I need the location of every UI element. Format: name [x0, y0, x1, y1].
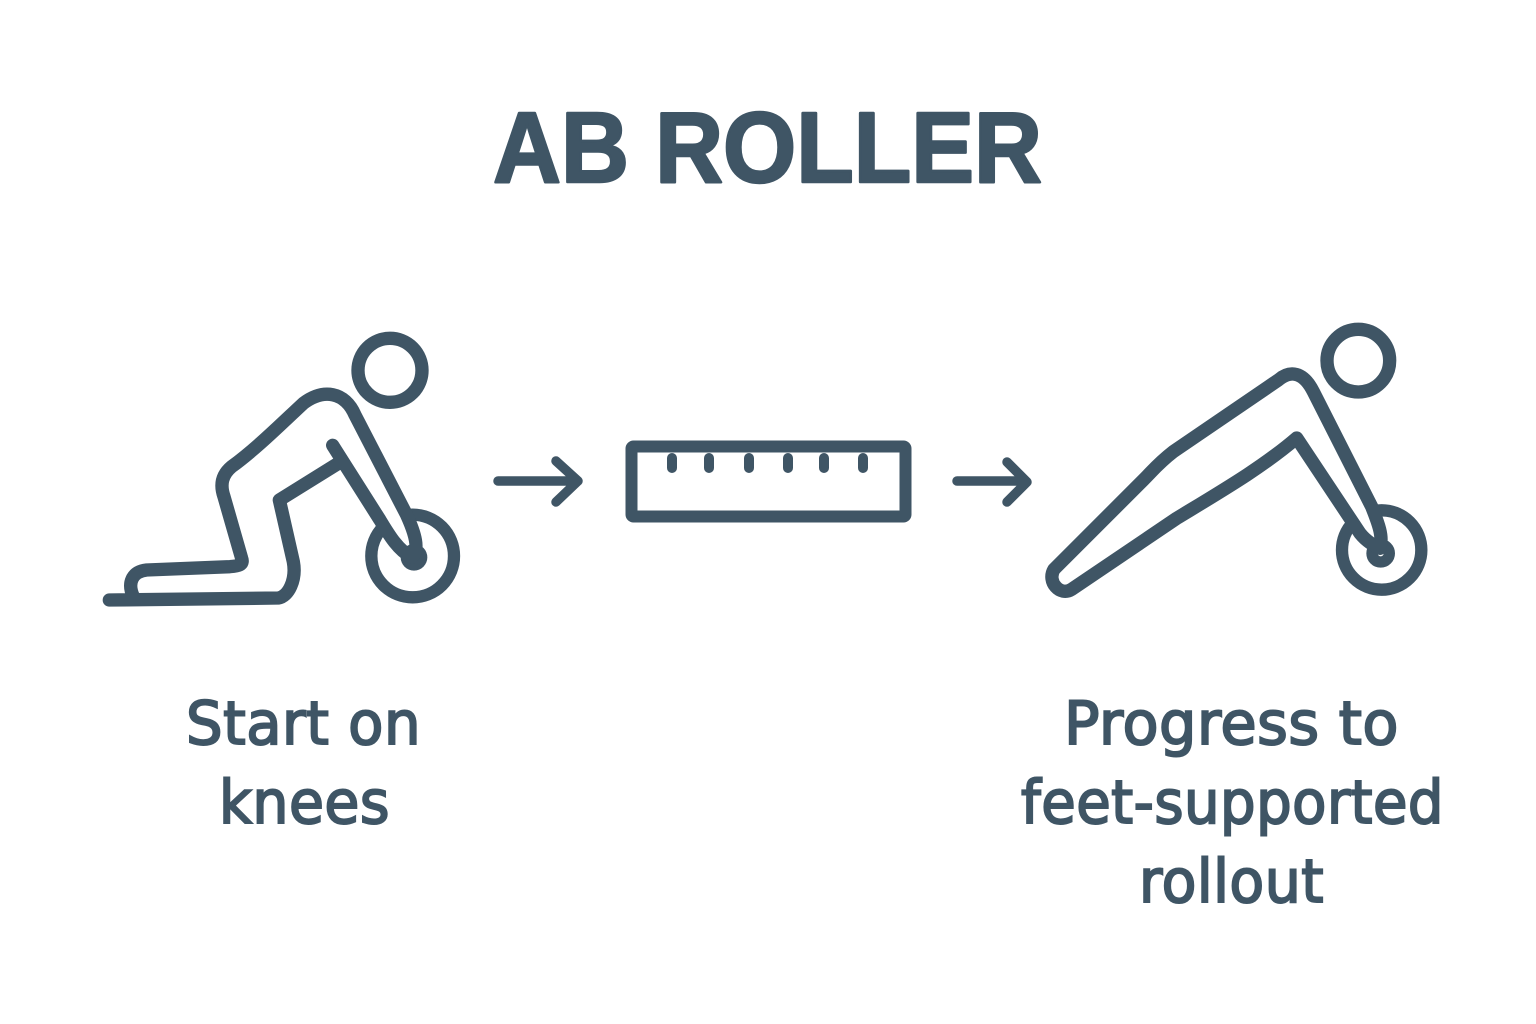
label: start on knees — [186, 689, 421, 838]
label: start on knees: knees — [219, 768, 390, 838]
icon: person in feet-supported rollout — [1052, 329, 1421, 591]
wheel — [1342, 510, 1421, 590]
title: AB ROLLER — [493, 92, 1042, 204]
label: progress to feet-supported rollout — [1021, 689, 1444, 917]
wheel hub — [401, 544, 427, 571]
label: progress to feet-supported rollout: feet-supported — [1021, 768, 1444, 838]
white wedge between the arms — [1307, 443, 1378, 537]
wheel — [371, 515, 454, 597]
icon: person on knees with ab roller — [109, 338, 454, 600]
label: progress to feet-supported rollout: rollout — [1139, 847, 1324, 917]
body outline — [109, 394, 416, 600]
white wedge between the arms — [343, 453, 412, 550]
label: progress to feet-supported rollout: Progress to — [1064, 689, 1399, 759]
arrow: ruler to feet-supported — [957, 462, 1027, 502]
icon: ruler — [632, 446, 906, 516]
head — [358, 338, 422, 402]
label: start on knees: Start on — [186, 689, 421, 759]
ruler ticks — [672, 458, 863, 468]
head — [1327, 329, 1390, 392]
wheel hub — [1372, 545, 1389, 562]
arrow: knees to ruler — [498, 461, 578, 502]
body outline — [1052, 374, 1381, 591]
